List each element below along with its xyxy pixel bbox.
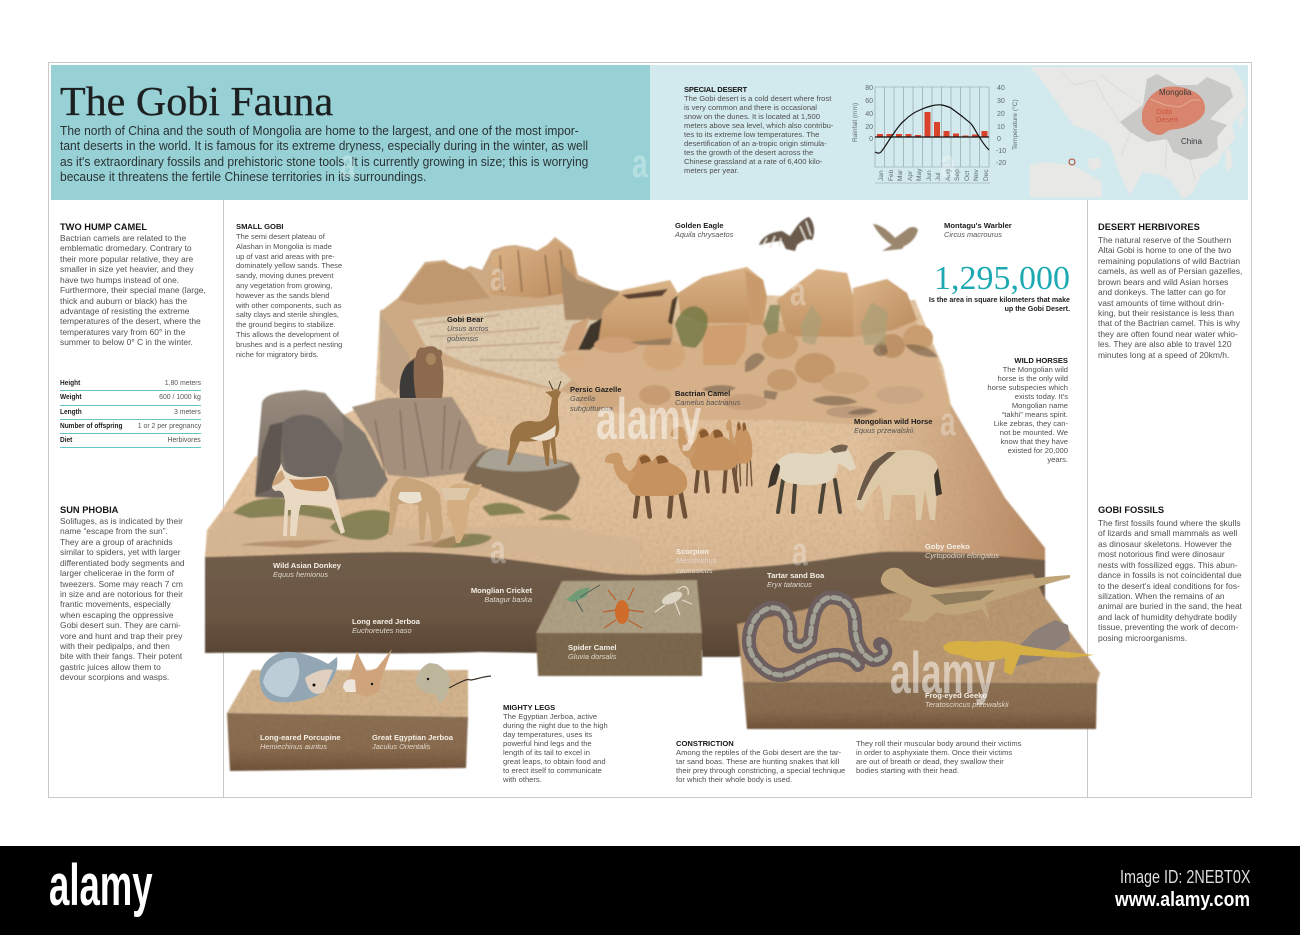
desert herbivores text: they are often found near water whio- <box>1098 329 1238 339</box>
watermark: small marks: a <box>940 400 956 444</box>
rainfall and temperature chart: 40 <box>997 85 1005 92</box>
small gobi text: brushes and is a perfect nesting <box>236 340 342 349</box>
label: scorpion: caucasicus <box>676 566 713 575</box>
big number caption <box>929 296 1070 313</box>
sun phobia text <box>60 505 185 682</box>
icon: long-eared porcupine <box>260 652 337 702</box>
small gobi text: any vegetation from growing, <box>236 281 332 290</box>
gobi fossils text: GOBI FOSSILS <box>1098 505 1164 515</box>
label: montagu's warbler: Montagu's Warbler <box>944 221 1012 230</box>
sun phobia text: when escaping the oppressive <box>60 610 174 620</box>
label: golden eagle <box>674 221 734 239</box>
watermark: small marks: a <box>632 142 648 186</box>
icon: great egyptian jerboa <box>416 663 491 703</box>
label: scorpion <box>676 547 716 575</box>
watermark: small marks: a <box>490 528 506 572</box>
gobi fossils text: to the desert's ideal conditions for fos- <box>1098 581 1240 591</box>
two hump camel text <box>60 222 206 347</box>
two hump camel text: their more popular relative, they are <box>60 254 193 264</box>
label: great egyptian jerboa: Great Egyptian Jerboa <box>372 733 453 742</box>
wild horses text: Mongolian name <box>1012 401 1068 410</box>
label: spider camel: Spider Camel <box>568 643 617 652</box>
label: montagu's warbler <box>944 221 1012 239</box>
label: golden eagle: Aquila chrysaetos <box>675 230 733 239</box>
label: golden eagle: Golden Eagle <box>675 221 724 230</box>
watermark: small marks: a <box>490 255 506 299</box>
label: persic gazelle: subgutturosa <box>570 404 613 413</box>
label: scorpion: Scorpion <box>676 547 709 556</box>
two hump camel text: temperatures of the desert, where the <box>60 316 201 326</box>
camel data table: Height <box>60 378 80 387</box>
icon: gobi bear <box>400 346 443 398</box>
label: wild asian donkey: Wild Asian Donkey <box>273 561 341 570</box>
footer logo: alamy <box>49 853 153 918</box>
gobi fossils text: and lack of humidity dehydrate bodily <box>1098 612 1237 622</box>
desert herbivores text: vast amounts of time without drin- <box>1098 298 1224 308</box>
wild horses text: exists today. It's <box>1015 392 1068 401</box>
back mesa <box>380 237 620 400</box>
constriction text: their prey through constricting, a special technique <box>676 766 845 775</box>
two hump camel text: advantage of resisting the extreme <box>60 306 189 316</box>
desert herbivores text: les. They are also able to travel 120 <box>1098 339 1232 349</box>
mighty legs text: to erect itself to communicate <box>503 766 602 775</box>
small gobi text: the ground begins to stabilize. <box>236 320 336 329</box>
wild horses text: horse subspecies which <box>987 383 1068 392</box>
rainfall and temperature chart: Feb <box>888 169 895 181</box>
locator map: Gobi <box>1156 107 1172 116</box>
special desert text: tes to its extreme low temperatures. The <box>684 130 819 139</box>
sun phobia text: gastric juices allow them to <box>60 662 161 672</box>
locator map: Mongolia <box>1159 88 1192 97</box>
sand surface <box>205 290 1045 640</box>
header panel: title background <box>51 65 650 200</box>
intro paragraph: The north of China and the south of Mongolia are home to the largest, and one of the most impor- <box>60 124 579 138</box>
gazelle boulder <box>463 448 580 512</box>
wild horses text: existed for 20,000 <box>1008 446 1068 455</box>
watermark: small marks: a <box>792 530 808 574</box>
camel data table: Weight <box>60 392 82 401</box>
gobi fossils text: as dinosaur skeletons. However the <box>1098 539 1232 549</box>
label: mongolian wild horse: Mongolian wild Horse <box>854 417 932 426</box>
special desert text <box>684 85 834 175</box>
rainfall and temperature chart: Jul <box>935 172 942 181</box>
locator map: Desert <box>1156 115 1179 124</box>
label: long eared jerboa: Long eared Jerboa <box>352 617 420 626</box>
icon: spider <box>603 588 644 628</box>
icon: mongolian wild horses <box>768 445 942 520</box>
mighty legs text: powerful hind legs and the <box>503 739 592 748</box>
camel data table: 1 or 2 per pregnancy <box>138 421 201 430</box>
label: mongolian cricket: Batagur baska <box>484 595 532 604</box>
rainfall and temperature chart: Jun <box>926 170 933 181</box>
right edge shading <box>860 405 1045 570</box>
mighty legs text: MIGHTY LEGS <box>503 703 555 712</box>
rainfall and temperature chart: 40 <box>865 111 873 118</box>
outer frame <box>48 62 1252 798</box>
label: mongolian wild horse <box>854 417 932 435</box>
gobi fossils text: of lizards and small mammals as well <box>1098 528 1237 538</box>
shadow patches <box>240 535 470 548</box>
label: montagu's warbler: Circus macrourus <box>944 230 1002 239</box>
sun phobia text: vore and hunt and trap their prey <box>60 631 182 641</box>
icon: long eared jerboa <box>343 649 392 697</box>
constriction text: for which their whole body is used. <box>676 775 792 784</box>
grey boulders <box>255 390 388 500</box>
small gobi text: up of vast arid areas with pre- <box>236 252 335 261</box>
sun phobia text: SUN PHOBIA <box>60 505 118 515</box>
sun phobia text: tweezers. Some may reach 7 cm <box>60 579 183 589</box>
rainfall and temperature chart: 60 <box>865 98 873 105</box>
small gobi text: however as the sands blend <box>236 291 329 300</box>
constriction text column 2: bodies starting with their head. <box>856 766 959 775</box>
small gobi text: niche for migratory birds. <box>236 350 319 359</box>
rainfall and temperature chart: 30 <box>997 98 1005 105</box>
wild horses text: “takhi” means spirit. <box>1002 410 1068 419</box>
two hump camel text: Furthermore, their special mane (large, <box>60 285 206 295</box>
constriction text: tar sand boas. These are hunting snakes that kill <box>676 757 839 766</box>
special desert text: is very common and there is occasional <box>684 103 817 112</box>
camel data table: Length <box>60 407 82 416</box>
constriction text column 2: They roll their muscular body around their victims <box>856 739 1021 748</box>
desert herbivores text: Altai Gobi is home to one of the two <box>1098 245 1231 255</box>
desert terrain block <box>205 237 1045 657</box>
label: great egyptian jerboa <box>372 733 454 751</box>
label: bactrian camel: Camelus bactrianus <box>675 398 740 407</box>
icon: wild asian donkey <box>272 463 345 536</box>
label: tartar sand boa: Tartar sand Boa <box>767 571 824 580</box>
special desert text: Chinese grassland at a rate of 6,400 kilo- <box>684 157 822 166</box>
rainfall and temperature chart <box>852 85 1019 183</box>
label: long-eared porcupine: Long-eared Porcupine <box>260 733 341 742</box>
rainfall and temperature chart: 80 <box>865 85 873 92</box>
sun phobia text: larger chelicerae in the form of <box>60 568 174 578</box>
intro paragraph: because it threatens the fertile Chinese territories in its surroundings. <box>60 170 426 184</box>
intro paragraph: as it's extraordinary fossils and prehistoric stone tools. It is currently growing in size; this is worrying <box>60 155 588 169</box>
desert herbivores text: and donkeys. The latter can go for <box>1098 287 1226 297</box>
label: mongolian cricket <box>471 586 532 604</box>
big number caption: up the Gobi Desert. <box>1005 305 1070 313</box>
rainfall and temperature chart: 20 <box>865 124 873 131</box>
icon: bactrian camels <box>605 420 752 517</box>
special desert text: SPECIAL DESERT <box>684 85 747 94</box>
special desert text: desertification of an a-tropic origin stimula- <box>684 139 827 148</box>
camel data table: 1,80 meters <box>165 378 201 387</box>
sun phobia text: name “escape from the sun”. <box>60 526 168 536</box>
boulder shadows <box>630 338 938 415</box>
label: gobi bear: Gobi Bear <box>447 315 483 324</box>
reptile block <box>737 574 1100 729</box>
label: long-eared porcupine <box>260 733 341 751</box>
label: mongolian cricket: Monglian Cricket <box>471 586 532 595</box>
two hump camel text: thick and auburn or black) has the <box>60 296 187 306</box>
constriction text: CONSTRICTION <box>676 739 734 748</box>
two hump camel text: have two humps instead of one. <box>60 275 179 285</box>
header panel: special desert background <box>650 65 1248 200</box>
special desert text: The Gobi desert is a cold desert where frost <box>684 94 831 103</box>
wild horses text: years. <box>1047 455 1068 464</box>
label: bactrian camel: Bactrian Camel <box>675 389 730 398</box>
label: spider camel: Gluvia dorsalis <box>568 652 616 661</box>
constriction text column 2: in order to asphyxiate them. Once their victims <box>856 748 1012 757</box>
desert herbivores text: DESERT HERBIVORES <box>1098 222 1200 232</box>
two hump camel text: emblematic dromedary. Contrary to <box>60 243 192 253</box>
gobi fossils text: The first fossils found where the skulls <box>1098 518 1241 528</box>
camel data table: Diet <box>60 435 72 444</box>
small gobi text: The semi desert plateau of <box>236 232 325 241</box>
special desert text: snow on the dunes. It is located at 1,500 <box>684 112 820 121</box>
scree <box>558 320 951 425</box>
icon: montagu's warbler <box>873 224 918 251</box>
rainfall and temperature chart: Nov <box>973 169 980 181</box>
icon: frog-eyed geeko <box>943 620 1094 675</box>
constriction text column 2: are out of breath or dead, they swallow their <box>856 757 1004 766</box>
two hump camel text: TWO HUMP CAMEL <box>60 222 147 232</box>
sun phobia text: devour scorpions and wasps. <box>60 672 169 682</box>
sun phobia text: frantic movements, especially <box>60 599 171 609</box>
wild horses text: horse is the only wild <box>998 374 1068 383</box>
footer image id: Image ID: 2NEBT0X <box>1120 867 1250 887</box>
small gobi text: salty clays and sterile shingles, <box>236 310 339 319</box>
sun phobia text: They are a group of arachnids <box>60 537 173 547</box>
rainfall and temperature chart: 0 <box>997 136 1001 143</box>
desert herbivores text: The natural reserve of the Southern <box>1098 235 1231 245</box>
rainfall and temperature chart: 20 <box>997 111 1005 118</box>
rainfall and temperature chart: Apr <box>907 170 914 181</box>
mighty legs text: The Egyptian Jerboa, active <box>503 712 597 721</box>
label: tartar sand boa: Eryx tataricus <box>767 580 812 589</box>
desert herbivores text: that of the Bactrian camel. This is why <box>1098 318 1240 328</box>
low scrub <box>233 498 572 548</box>
spider block <box>536 580 702 676</box>
big number caption: Is the area in square kilometers that make <box>929 296 1070 304</box>
rainfall and temperature chart: Temperature (°C) <box>1011 99 1019 150</box>
rainfall and temperature chart: 10 <box>997 124 1005 131</box>
watermark: lower right: alamy <box>890 641 995 706</box>
label: goby geeko: Goby Geeko <box>925 542 970 551</box>
icon: golden eagle <box>759 217 814 251</box>
trees <box>675 306 708 348</box>
desert herbivores text: king, but their resistance is less than <box>1098 308 1234 318</box>
label: bactrian camel <box>675 389 740 407</box>
rainfall and temperature chart: Mar <box>897 169 904 181</box>
gobi fossils text: dance in fossils is not coincidental due <box>1098 570 1242 580</box>
rainfall and temperature chart: Oct <box>964 171 971 181</box>
rainfall and temperature chart: -20 <box>996 160 1006 167</box>
label: gobi bear: Ursus arctos <box>447 324 488 333</box>
small gobi text: This allows the development of <box>236 330 339 339</box>
intro paragraph: tant deserts in the world. It is famous for its extreme dryness, especially during in the winter, as well <box>60 139 588 153</box>
icon: scorpion <box>655 587 692 615</box>
rainfall and temperature chart: Rainfall (mm) <box>852 103 859 142</box>
locator map <box>1030 67 1247 199</box>
label: tartar sand boa <box>767 571 824 589</box>
camel data table: Number of offspring <box>60 421 123 430</box>
icon: persic gazelle <box>507 381 561 466</box>
sun phobia text: with their pedipalps, and then <box>60 641 170 651</box>
desert herbivores text <box>1098 222 1242 360</box>
gobi fossils text: posing microorganisms. <box>1098 633 1187 643</box>
sun phobia text: similar to spiders, yet with larger <box>60 547 181 557</box>
icon: cricket <box>566 585 600 612</box>
icon: donkeys grazing <box>388 477 482 543</box>
two hump camel text: summer to below 0° C in the winter. <box>60 337 193 347</box>
footer band <box>0 846 1300 935</box>
label: frog-eyed geeko <box>925 691 1009 709</box>
label: spider camel <box>568 643 617 661</box>
constriction text <box>676 739 845 784</box>
rainfall and temperature chart: 0 <box>869 136 873 143</box>
wild horses text: The Mongolian wild <box>1003 365 1068 374</box>
small gobi text: SMALL GOBI <box>236 222 284 231</box>
gobi fossils text: most notorious find were dinosaur <box>1098 549 1225 559</box>
mighty legs text: great leaps, to obtain food and <box>503 757 606 766</box>
soil band <box>205 552 1045 657</box>
foreground sand <box>205 512 640 570</box>
rainfall and temperature chart: Dec <box>983 169 990 181</box>
label: persic gazelle: Persic Gazelle <box>570 385 622 394</box>
gobi fossils text <box>1098 505 1242 643</box>
sun phobia text: Solifuges, as is indicated by their <box>60 516 183 526</box>
mighty legs text: day temperatures, uses its <box>503 730 592 739</box>
rainfall and temperature chart: Aug <box>945 169 952 181</box>
special desert text: tes the growth of the desert across the <box>684 148 813 157</box>
label: wild asian donkey <box>273 561 341 579</box>
icon: tartar sand boa <box>749 597 885 675</box>
label: goby geeko: Cyrtopodion elongatus <box>925 551 999 560</box>
label: goby geeko <box>925 542 999 560</box>
gobi fossils text: silization. When the remains of an <box>1098 591 1225 601</box>
rainfall and temperature chart: May <box>916 168 923 181</box>
sandstone boulders <box>560 262 620 320</box>
watermark: small marks <box>340 142 956 574</box>
mighty legs text: during the night due to the high <box>503 721 608 730</box>
jerboa block <box>227 670 468 771</box>
sun phobia text: Gobi desert sun. They are carni- <box>60 620 181 630</box>
two hump camel text: temperatures vary from 60° in the <box>60 327 185 337</box>
small gobi text <box>236 222 342 359</box>
footer url: www.alamy.com <box>1115 889 1250 911</box>
constriction text column 2 <box>856 739 1022 775</box>
label: persic gazelle <box>570 385 622 413</box>
label: long eared jerboa <box>352 617 420 635</box>
gobi fossils text: nests with fossilized eggs. This abun- <box>1098 560 1238 570</box>
rainfall and temperature chart: Jan <box>878 170 885 181</box>
mighty legs text: length of its tail to excel in <box>503 748 590 757</box>
watermark: small marks: a <box>790 270 806 314</box>
label: persic gazelle: Gazella <box>570 394 595 403</box>
camel data table: 3 meters <box>174 407 201 416</box>
gobi fossils text: animal are buried in the sand, the heat <box>1098 601 1242 611</box>
label: scorpion: Mesobuthus <box>676 556 716 565</box>
wild horses text: know that they have <box>1000 437 1068 446</box>
locator map: China <box>1181 137 1202 146</box>
label: wild asian donkey: Equus hemionus <box>273 570 328 579</box>
mighty legs text: with others. <box>503 775 542 784</box>
gobi fossils text: tissue, preventing the work of decom- <box>1098 622 1238 632</box>
sun phobia text: differentiated body segments and <box>60 558 185 568</box>
small gobi text: sandy, moving dunes prevent <box>236 271 333 280</box>
label: gobi bear: gobiensis <box>447 334 478 343</box>
wild horses text: Like zebras, they can- <box>994 419 1068 428</box>
two hump camel text: smaller in size yet heavier, and they <box>60 264 194 274</box>
label: great egyptian jerboa: Jaculus Orientalis <box>372 742 430 751</box>
watermark: small marks: a <box>940 142 956 186</box>
small gobi text: dominately yellow sands. These <box>236 261 342 270</box>
small gobi text: with other components, such as <box>236 301 341 310</box>
rainfall and temperature chart: -10 <box>996 148 1006 155</box>
mighty legs text <box>503 703 608 784</box>
camel data table <box>60 378 202 448</box>
two hump camel text: Bactrian camels are related to the <box>60 233 186 243</box>
desert herbivores text: brown bears and wild Asian horses <box>1098 277 1228 287</box>
small gobi text: Alashan in Mongolia is made <box>236 242 332 251</box>
big number: 1,295,000 <box>934 260 1070 297</box>
label: long-eared porcupine: Hemiechinus auritus <box>260 742 327 751</box>
label: frog-eyed geeko: Frog-eyed Geeko <box>925 691 987 700</box>
desert herbivores text: camels, as well as of Persian gazelles, <box>1098 266 1242 276</box>
desert herbivores text: minutes long at a speed of 20km/h. <box>1098 350 1229 360</box>
watermark: small marks: a <box>340 142 356 186</box>
rounded boulders <box>762 331 798 359</box>
icon: goby geeko <box>881 568 1070 622</box>
label: long eared jerboa: Euchoreutes naso <box>352 626 412 635</box>
sun phobia text: bite with their fangs. Their potent <box>60 651 182 661</box>
watermark: centre: alamy <box>596 387 701 452</box>
special desert text: meters above sea level, which also contribu- <box>684 121 833 130</box>
label: frog-eyed geeko: Teratoscincus przewalskii <box>925 700 1009 709</box>
label: mongolian wild horse: Equus przewalskii <box>854 426 913 435</box>
rainfall and temperature chart: Sep <box>954 169 961 181</box>
label: gobi bear <box>447 315 488 343</box>
desert herbivores text: remaining populations of wild Bactrian <box>1098 256 1240 266</box>
wild horses text <box>987 356 1068 464</box>
title: The Gobi Fauna <box>60 78 333 124</box>
sun phobia text: in size and are notorious for their <box>60 589 183 599</box>
special desert text: meters per year. <box>684 166 739 175</box>
wild horses text: WILD HORSES <box>1014 356 1068 365</box>
wild horses text: not be mounted. We <box>1000 428 1068 437</box>
constriction text: Among the reptiles of the Gobi desert are the tar- <box>676 748 841 757</box>
camel data table: 600 / 1000 kg <box>159 392 201 401</box>
camel data table: Herbivores <box>168 435 201 444</box>
intro paragraph <box>60 124 588 184</box>
